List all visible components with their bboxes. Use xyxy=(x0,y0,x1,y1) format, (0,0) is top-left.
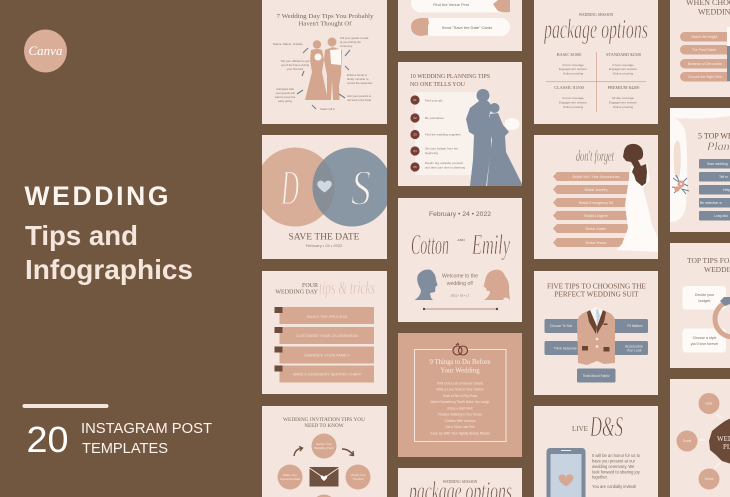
arch background xyxy=(670,115,730,232)
heading xyxy=(283,418,365,427)
tip list: 04 xyxy=(413,149,417,153)
tip labels: ceremony xyxy=(340,44,353,48)
step circle top xyxy=(312,434,336,458)
package details: Online proofing xyxy=(613,105,633,109)
heading: FIVE TIPS TO CHOOSING THE xyxy=(547,282,646,290)
package tiers: STANDARD $2500 xyxy=(606,52,641,57)
panel: 5 top wedding planning xyxy=(670,108,730,232)
tip list: Be yourselves xyxy=(425,116,444,120)
button labels: Fit Matters xyxy=(627,324,643,328)
date: February • 24 • 2022 xyxy=(429,211,491,218)
tip list: Dream big, educate yourself, xyxy=(425,161,464,165)
step circle right: Check Your xyxy=(350,473,366,477)
venn right circle xyxy=(312,148,392,226)
tip bar 2: CUSTOMIZE YOUR CELEBRATION xyxy=(296,334,358,338)
template count: 20 xyxy=(26,419,68,460)
venn overlap xyxy=(312,160,334,214)
tip labels: Nature. Nature. Outside xyxy=(273,42,303,46)
panel: live stream xyxy=(534,406,658,497)
tip list: Find your girl xyxy=(425,98,443,102)
pill labels: Bonanza of Decoration xyxy=(688,62,722,66)
tip labels: out of the frame during xyxy=(281,63,310,67)
tip labels: Tell your guests to look xyxy=(340,36,369,40)
icon: envelope xyxy=(310,467,338,486)
list: Watch Something That'll Make You Laugh xyxy=(431,400,490,404)
pill: find the venue: Find the Venue First xyxy=(433,2,470,7)
connector arrows xyxy=(699,414,722,468)
step circle left xyxy=(278,464,302,490)
heading: 7 Wedding Day Tips You Probably xyxy=(276,13,374,20)
heading: Tips and Infographics xyxy=(25,220,193,285)
step circle right: Timeline xyxy=(352,477,364,481)
icon: heart xyxy=(317,181,332,192)
card: budget xyxy=(682,286,726,310)
panel: when choosing wedding xyxy=(670,0,730,97)
message text: wedding ceremony. We xyxy=(592,464,635,469)
heading: 9 Things to Do Before xyxy=(429,359,491,366)
step circle top: Gather Your xyxy=(316,442,332,446)
pill: save the date cards: Send "Save the Date" Cards xyxy=(442,25,492,30)
tip bar labels xyxy=(700,162,730,218)
heading: LIVE xyxy=(572,425,588,433)
heading xyxy=(572,417,623,436)
panel: don't forget xyxy=(534,135,658,259)
panel: package options lower xyxy=(398,468,522,497)
checklist labels: Bridal Jewelry xyxy=(585,188,608,192)
names: AND xyxy=(457,238,465,242)
hub blob xyxy=(709,418,730,464)
tip labels: Anticipate that xyxy=(276,87,294,91)
heading xyxy=(698,132,730,153)
button labels xyxy=(550,324,643,378)
heading: 10 WEDDING PLANNING TIPS xyxy=(410,73,490,80)
message text xyxy=(592,453,641,489)
list: Enjoy a Bath Melt xyxy=(448,406,473,410)
tip labels: Ask your parents to xyxy=(347,94,372,98)
heading: FOUR xyxy=(302,283,318,289)
tip labels: at you during the xyxy=(340,40,361,44)
package details: Engagement session xyxy=(609,100,637,104)
silhouette: couple slate xyxy=(466,89,522,186)
heading xyxy=(429,359,491,374)
panel: wedding invitation tips xyxy=(262,406,387,497)
panel: timeline pills xyxy=(398,0,522,51)
tip labels: Tell your officiant to get xyxy=(281,59,309,63)
tip list: 05 xyxy=(413,165,417,169)
message text: It will be an honor for us to xyxy=(592,453,641,458)
grid lines xyxy=(546,52,646,112)
panel: 7 wedding day tips xyxy=(262,0,387,124)
tip bar labels: Tell m xyxy=(719,175,728,179)
package details: 4 hour coverage xyxy=(562,63,584,67)
icon: flower bouquet xyxy=(672,175,689,194)
card: budget: budget! xyxy=(698,299,710,303)
tip labels: record the speeches xyxy=(347,81,373,85)
tip labels: party going xyxy=(278,99,292,103)
heading xyxy=(275,278,375,299)
step circle left: Make Your xyxy=(283,473,297,477)
package details xyxy=(559,63,637,109)
frame xyxy=(414,350,506,442)
step circle top: Wedding Party xyxy=(314,446,334,450)
cover text panel xyxy=(22,30,212,460)
panel: four wedding day tips and tricks xyxy=(262,271,387,394)
heading: WEDDING DAY xyxy=(275,290,319,296)
timeline line xyxy=(423,308,498,310)
tip list: 03 xyxy=(413,132,417,136)
node: date: Date xyxy=(706,402,713,406)
template count xyxy=(26,419,212,460)
panel: venn save the date: D xyxy=(281,159,299,215)
tip bar 3: EMBRACE YOUR FAMILY xyxy=(304,354,350,358)
heading: WEDDING: WEDDING xyxy=(24,181,168,211)
heading: PERFECT WEDDING SUIT xyxy=(554,290,639,298)
node: venue: Venue xyxy=(704,477,714,481)
welcome text: wedding of! xyxy=(447,281,473,287)
package details: Engagement session xyxy=(559,100,587,104)
button labels: Think Seasonal xyxy=(554,346,577,350)
tip labels: want to keep the xyxy=(275,95,296,99)
venn left circle xyxy=(262,148,324,226)
panel: package options xyxy=(534,0,658,124)
heading: WEDDING INVITATION TIPS YOU xyxy=(283,417,365,423)
checklist arrows xyxy=(553,172,629,247)
heading: Your Wedding xyxy=(440,368,480,374)
template count: TEMPLATES xyxy=(82,440,168,457)
icon: Canva logo badge: Canva xyxy=(29,43,63,58)
icon: Canva logo badge xyxy=(24,30,67,72)
heading xyxy=(687,256,730,274)
tip rows background xyxy=(415,92,490,175)
button labels: Your Look xyxy=(627,348,642,352)
checklist labels: Bridal Veil / Hair Accessories xyxy=(573,175,620,179)
heading xyxy=(547,282,646,298)
heading: NO ONE TELLS YOU xyxy=(410,81,465,88)
tip labels: not work once fixed xyxy=(347,98,372,102)
package details: 4 hour coverage xyxy=(562,96,584,100)
tip bars xyxy=(699,159,730,220)
package details: Online proofing xyxy=(613,72,633,76)
silhouette: groom head xyxy=(414,270,438,300)
icon: ring xyxy=(715,297,730,337)
pill list xyxy=(680,32,730,82)
card: style: Choose a style xyxy=(693,336,716,340)
pill labels: Match the Height xyxy=(692,35,717,39)
list xyxy=(430,382,490,436)
button labels: Accessorize xyxy=(625,344,643,348)
list: Practice Walking in Your Shoes xyxy=(438,412,482,416)
message text: You are cordially invited! xyxy=(592,484,636,489)
heading: Tips and Infographics: Tips and xyxy=(25,220,138,251)
tip list: Find the wedding suppliers xyxy=(425,132,461,136)
node: guest: Guest xyxy=(683,439,691,443)
panel: 9 things before your wedding xyxy=(398,333,522,457)
illustration: suit jacket xyxy=(577,307,615,365)
tip bar 4: MAKE A CEREMONY SEATING CHART xyxy=(293,372,362,376)
tip labels xyxy=(273,36,373,111)
heading: WEDDING SESSION xyxy=(443,480,477,484)
card: budget: Decide your xyxy=(695,293,715,297)
heading: WEDDING SESSION xyxy=(579,13,613,17)
silhouette: couple xyxy=(305,38,342,100)
tip labels: your guests will xyxy=(275,91,295,95)
welcome text: Welcome to the xyxy=(442,274,478,280)
panel: save the date names xyxy=(398,198,522,322)
tip bar 1: ENJOY THE PROCESS xyxy=(307,315,348,319)
message text: have you present at our xyxy=(592,458,636,464)
package tiers xyxy=(554,52,641,90)
heading xyxy=(686,0,730,16)
tip labels: Enlist a friend or xyxy=(347,73,367,77)
tip buttons xyxy=(544,319,648,382)
package tiers: CLASSIC $1500 xyxy=(554,85,584,90)
package details: 4 hour coverage xyxy=(612,63,634,67)
tip bar labels: Start wedding xyxy=(707,162,728,166)
script title: package options xyxy=(543,14,648,44)
silhouette: bride xyxy=(616,144,658,252)
list: Confirm With Vendors xyxy=(444,419,476,423)
package details: Engagement session xyxy=(559,67,587,71)
arrows xyxy=(294,446,354,456)
panel: wedding plan hub xyxy=(670,379,730,497)
divider bar xyxy=(22,404,108,408)
checklist labels: Bridal Shoes xyxy=(586,241,607,245)
package tiers: BASIC $1000 xyxy=(557,52,581,57)
suit fragment xyxy=(727,27,730,81)
tip list xyxy=(410,95,465,172)
tip list: beginning xyxy=(425,151,438,155)
silhouette: bride head xyxy=(484,270,510,300)
message text: together. xyxy=(592,474,608,480)
heading xyxy=(410,74,490,86)
panel: venn save the date xyxy=(256,135,392,259)
tip labels: Soak it all in xyxy=(320,107,336,111)
list: Get a Glow Last Pee xyxy=(445,425,475,429)
card: style xyxy=(682,328,726,352)
step circle left: Guests Excited xyxy=(280,477,300,481)
heading xyxy=(276,13,374,28)
tip bar labels: Long dist xyxy=(714,214,728,218)
heading: tips & tricks xyxy=(319,278,375,299)
heading: D&S xyxy=(589,412,623,443)
package details: Online proofing xyxy=(563,105,583,109)
list: Print Out a List of Vendor Details xyxy=(437,382,484,386)
names: Cotton xyxy=(411,229,449,261)
checklist labels xyxy=(573,175,620,245)
heading: Tips and Infographics: Infographics xyxy=(25,254,193,285)
welcome text xyxy=(442,274,478,298)
package details: Engagement session xyxy=(609,67,637,71)
monogram S: S xyxy=(351,159,371,215)
checklist labels: Bridal Lingerie xyxy=(584,214,608,218)
step circle bottom xyxy=(316,494,332,497)
tip labels: family member to xyxy=(347,77,369,81)
step circle right xyxy=(346,464,370,490)
heading: Haven't Thought Of xyxy=(299,20,352,28)
tip list: 02 xyxy=(413,116,417,120)
package details: Online proofing xyxy=(563,72,583,76)
list: Grab a Pair of Flip Flops xyxy=(443,394,478,398)
icon: rings xyxy=(453,344,468,355)
package details: All day coverage xyxy=(612,96,634,100)
checklist labels: Bridal Garter xyxy=(586,227,607,231)
list: Write a Love Note to Your Partner xyxy=(436,388,485,392)
icon: phone with heart xyxy=(546,448,586,497)
welcome text: 2021 • 05 • 17 xyxy=(451,294,470,298)
checklist labels: Bridal Emergency Kit xyxy=(579,201,613,205)
pill labels: The Pant Fabric xyxy=(692,48,716,52)
names: Emily xyxy=(471,229,510,261)
date: February • 24 • 2022 xyxy=(306,243,343,248)
arrows xyxy=(297,48,350,109)
tip bar labels: Be selective w xyxy=(700,201,722,205)
tip labels: your first kiss xyxy=(287,67,304,71)
panel: wedding suit tips xyxy=(534,271,658,395)
curtain strip xyxy=(674,140,681,178)
panel: 10 wedding planning tips xyxy=(398,62,522,186)
package tiers: PREMIUM $4200 xyxy=(608,85,639,90)
list: Keep Up With Your Nightly Beauty Rituals xyxy=(430,432,490,436)
pill labels: Choose the Right Shirt xyxy=(688,75,722,79)
panel: top tips for wedding xyxy=(670,243,730,368)
tip list: and take your time in planning xyxy=(425,166,465,170)
title: save the date: SAVE THE DATE xyxy=(288,232,360,242)
card: style: you'll love forever xyxy=(691,342,719,346)
button labels: Choose To Suit xyxy=(550,324,572,328)
script title: don't forget xyxy=(576,148,614,165)
template count: INSTAGRAM POST xyxy=(81,420,212,437)
message text: look forward to sharing joy xyxy=(592,470,641,474)
button labels: Think About Fabric xyxy=(582,374,610,378)
heading: NEED TO KNOW xyxy=(304,423,344,429)
tip list: Set your budget from the xyxy=(425,146,458,150)
tip list: 01 xyxy=(413,98,417,102)
pill labels xyxy=(688,35,722,79)
